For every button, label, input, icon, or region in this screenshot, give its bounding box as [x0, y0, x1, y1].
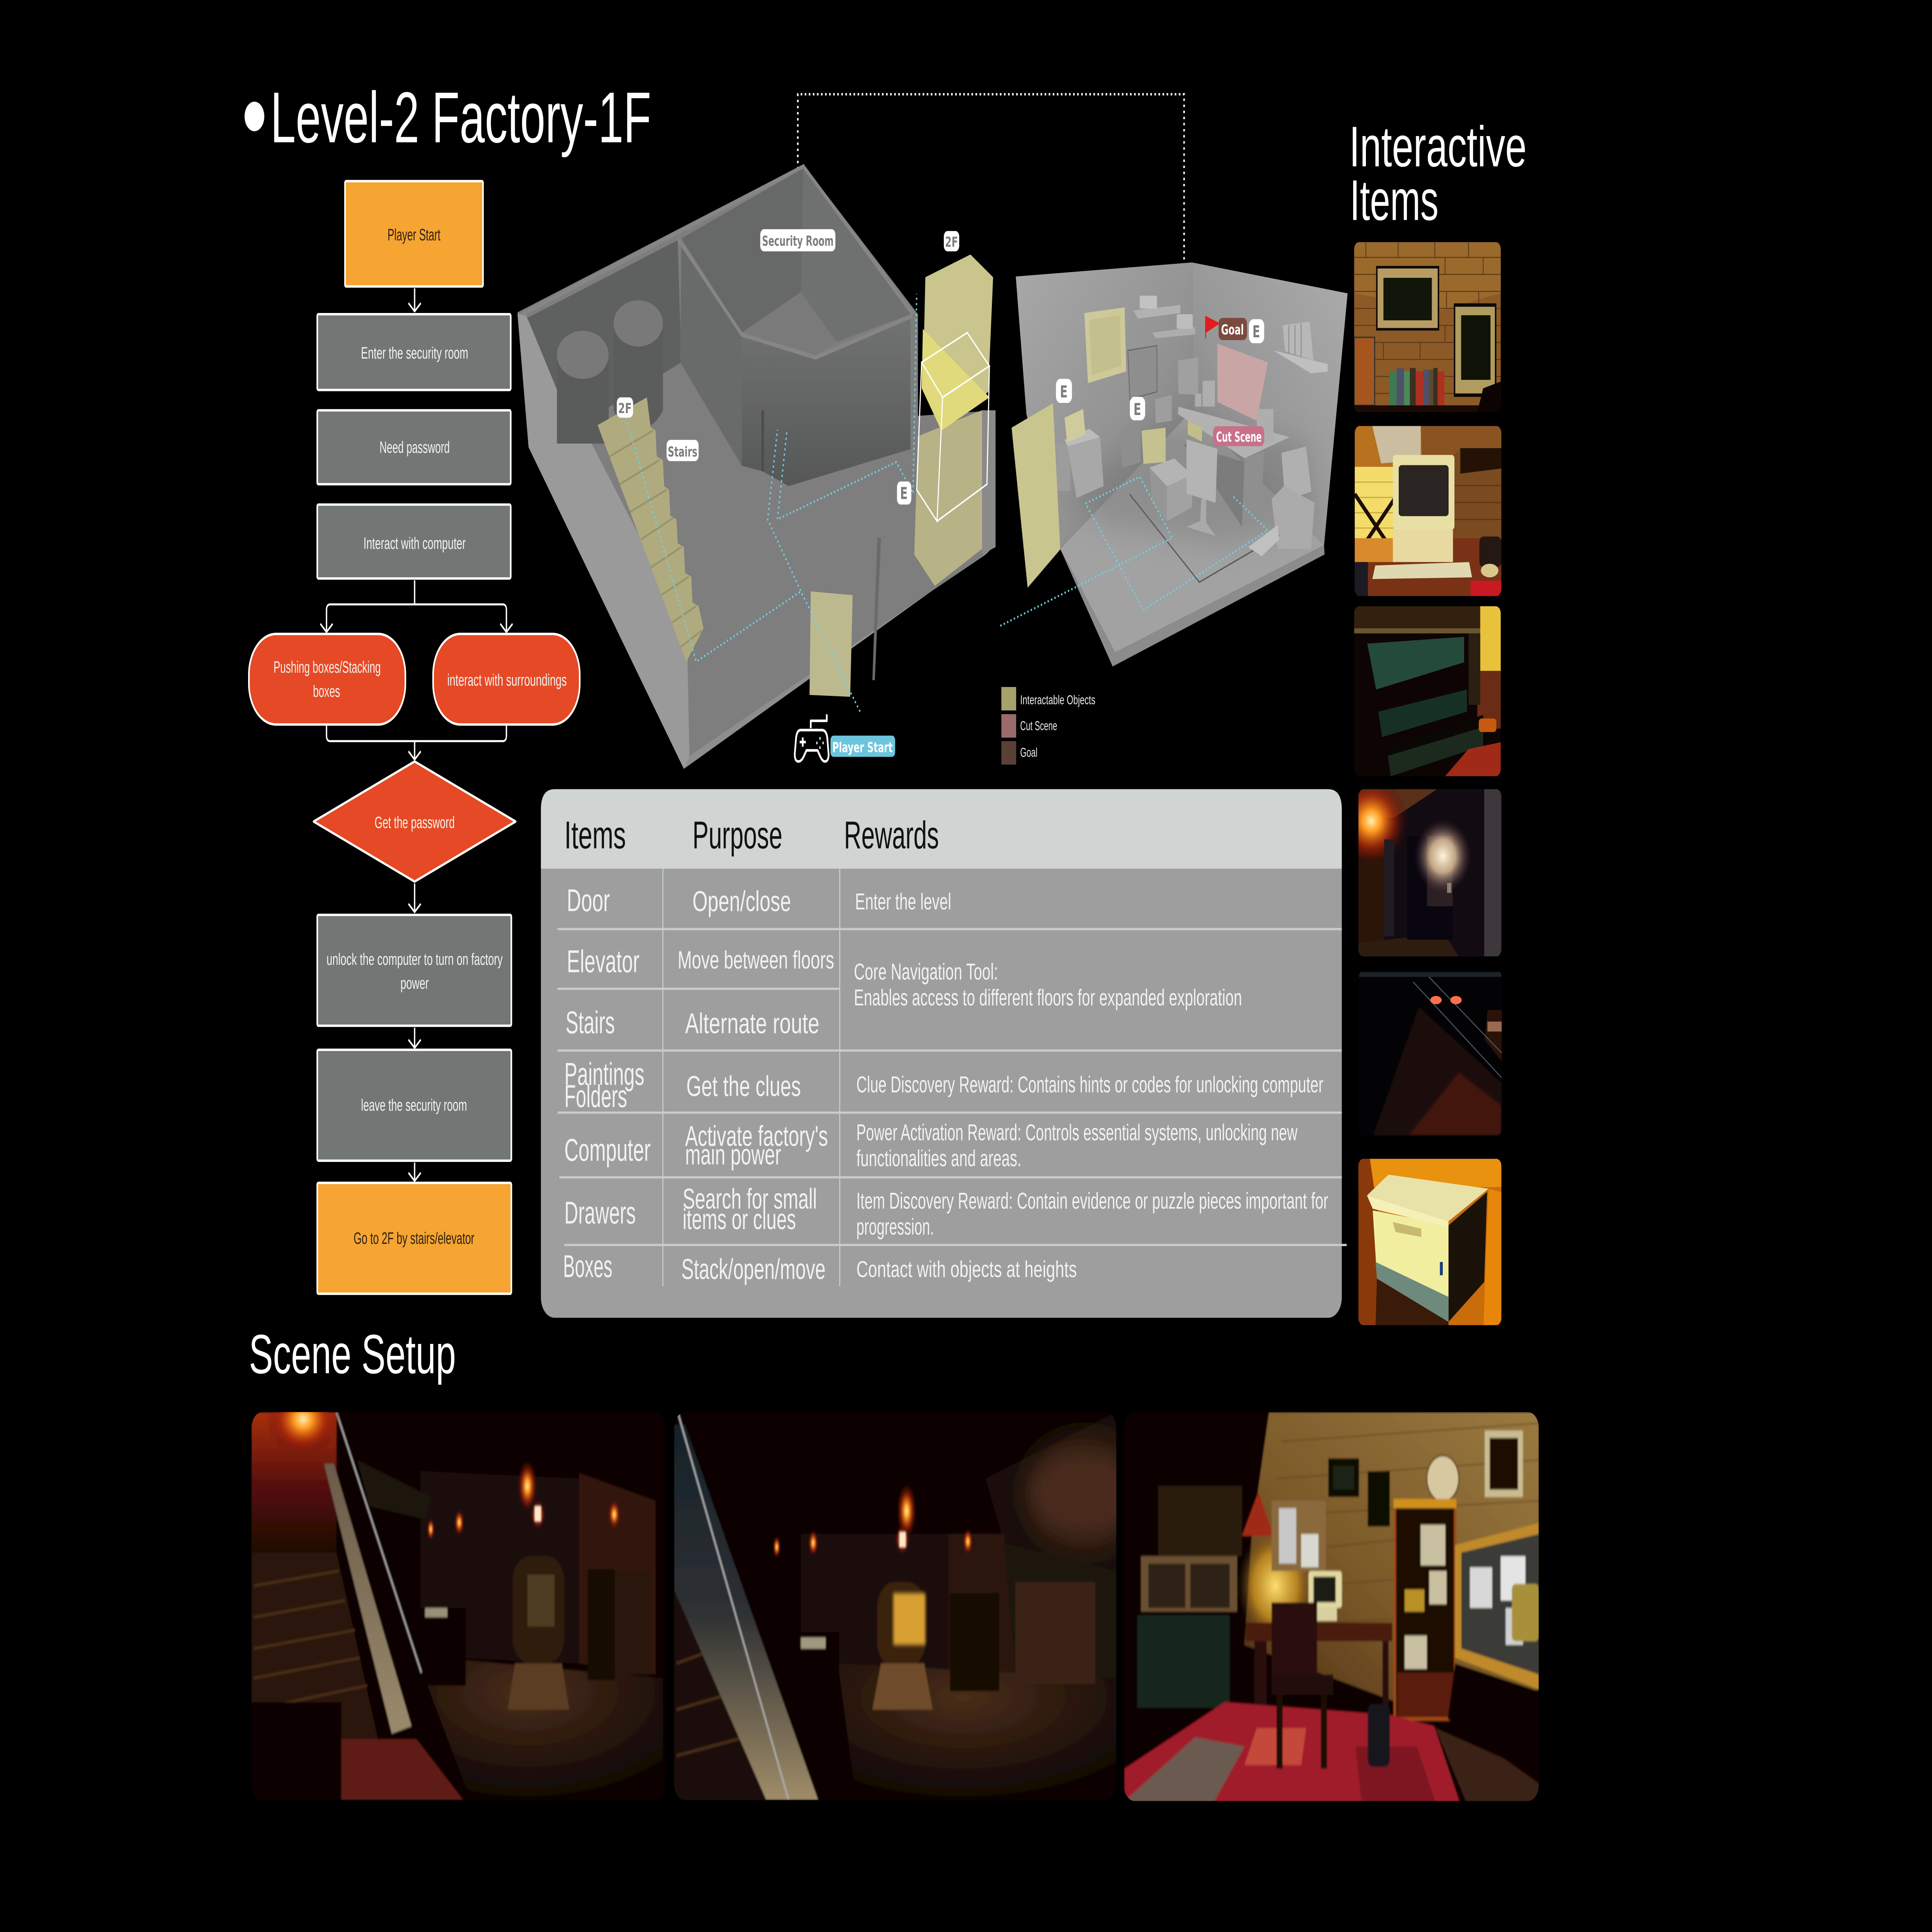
column: items: Computer	[564, 1132, 651, 1167]
decision: Get the password: Get the password	[374, 813, 455, 832]
column: purpose: Activate factory's	[685, 1121, 828, 1152]
wall rims	[522, 166, 913, 358]
step: Player Start: Player Start	[388, 225, 440, 244]
decision: Get the password	[314, 762, 516, 882]
left wall	[1016, 262, 1192, 549]
heading: Scene Setup: Scene Setup	[249, 1323, 456, 1385]
table header: Purpose	[692, 814, 782, 857]
tag: E box: E	[1134, 400, 1141, 419]
column: items: Folders	[564, 1078, 627, 1114]
column: items: Door	[567, 883, 610, 918]
legend	[1002, 687, 1095, 765]
photo: dark staircase	[1359, 970, 1502, 1136]
column: rewards: Clue Discovery Reward: Contains hints or codes for unlocking computer	[856, 1071, 1323, 1097]
step: Player Start	[345, 181, 483, 286]
legend: goal: Goal	[1020, 745, 1037, 760]
elevator tower	[914, 255, 996, 586]
table header: Rewards	[844, 814, 939, 857]
legend: interactable	[1002, 687, 1095, 711]
tag: Security Room: Security Room	[762, 233, 833, 250]
tag: 2F stairs: 2F	[618, 401, 632, 417]
legend: interactable: Interactable Objects	[1020, 693, 1095, 707]
photo: elevator door	[1359, 789, 1502, 957]
back wall of open room	[527, 240, 681, 444]
photo: open drawers	[1354, 606, 1501, 776]
column: purpose: main power	[685, 1139, 781, 1171]
title: Level-2 Factory-1F	[270, 77, 651, 158]
column: purpose: Move between floors	[678, 946, 834, 974]
column: items: Paintings	[564, 1056, 645, 1092]
column: rewards: Contact with objects at heights	[856, 1256, 1077, 1282]
tag: E door	[1056, 379, 1072, 403]
floor	[1060, 410, 1324, 652]
step: leave the security room: leave the security room	[361, 1096, 467, 1114]
player start marker	[795, 714, 895, 762]
tag: Stairs: Stairs	[668, 444, 697, 460]
column: items: Boxes	[563, 1248, 612, 1284]
table header	[541, 789, 1342, 869]
flowchart	[249, 181, 580, 1294]
legend: cut scene	[1002, 714, 1057, 738]
security room interior	[681, 168, 803, 333]
tag: E key	[897, 481, 911, 505]
factory floor plan 3D model	[517, 165, 996, 769]
items table	[541, 789, 1347, 1318]
diagonal partition wall	[680, 242, 742, 466]
tag: 2F stairs	[617, 397, 633, 418]
step: Need password: Need password	[379, 438, 450, 456]
column: rewards	[854, 888, 1328, 1282]
tag: E goal	[1249, 319, 1264, 343]
tag: E key: E	[900, 483, 908, 503]
table header: Items	[564, 814, 626, 857]
step: leave the security room	[317, 1050, 511, 1161]
player start marker: Player Start	[832, 740, 893, 756]
step: Interact with computer: Interact with computer	[364, 534, 466, 553]
cyan route	[626, 294, 917, 712]
step: unlock the computer: unlock the computer to turn on factory	[327, 950, 503, 968]
speaker and computer parts	[1195, 381, 1274, 442]
column: purpose: Get the clues	[686, 1071, 801, 1102]
thin pole	[872, 538, 881, 680]
step: interact with surroundings	[433, 634, 580, 724]
icon: goal flag	[1206, 316, 1219, 338]
step: unlock the computer	[317, 915, 511, 1026]
step: interact with surroundings: interact with surroundings	[447, 671, 567, 689]
floor rug outline	[1129, 494, 1279, 582]
tag: E box	[1130, 397, 1145, 420]
security room outer walls	[742, 318, 911, 486]
step: Pushing boxes: boxes	[313, 682, 340, 701]
heading: Interactive Items: Items	[1350, 168, 1439, 232]
chair	[1187, 439, 1218, 536]
desk	[1178, 406, 1290, 527]
tag: Cut Scene: Cut Scene	[1216, 429, 1262, 446]
step: unlock the computer: power	[400, 974, 429, 992]
photo: office corner with desk	[1124, 1412, 1539, 1802]
heading: Interactive Items: Interactive	[1349, 114, 1527, 179]
table grid	[558, 869, 1347, 1286]
column: items: Drawers	[564, 1195, 636, 1230]
photo: cardboard box	[1359, 1159, 1502, 1325]
stairs	[598, 397, 704, 662]
cyan route	[1000, 477, 1268, 626]
column: purpose: Open/close	[692, 886, 791, 918]
white dotted connector between rooms	[798, 94, 1184, 277]
tag: 2F tower	[944, 231, 959, 252]
door panel	[810, 592, 853, 697]
column: items	[563, 883, 651, 1284]
boxes	[1057, 357, 1315, 549]
thin partition	[762, 410, 764, 471]
tag: E door: E	[1060, 382, 1068, 401]
step: Interact with computer	[317, 505, 511, 578]
tag: 2F tower: 2F	[945, 235, 958, 250]
column: purpose	[678, 886, 834, 1285]
papers	[1248, 525, 1279, 556]
cylinders	[557, 300, 663, 444]
ambient shadow under furniture	[1060, 422, 1312, 545]
column: rewards: functionalities and areas.	[856, 1145, 1021, 1171]
step: Need password	[317, 410, 511, 484]
step: Enter the security room	[317, 314, 511, 390]
column: purpose: Alternate route	[685, 1008, 820, 1039]
photo: old computer on desk	[1355, 426, 1502, 596]
step: Pushing boxes: Pushing boxes/Stacking	[274, 658, 381, 676]
security room 3D model	[1000, 262, 1348, 667]
column: rewards: Enables access to different floors for expanded exploration	[854, 985, 1242, 1010]
photo: corridor with stairs, view two	[674, 1412, 1143, 1800]
flow arrows	[320, 288, 513, 1181]
column: purpose: Stack/open/move	[681, 1253, 825, 1285]
column: items: Stairs	[566, 1005, 615, 1040]
step: Go to 2F	[317, 1183, 511, 1294]
tag: E goal: E	[1252, 322, 1260, 342]
column: rewards: progression.	[856, 1214, 934, 1240]
tag: Goal: Goal	[1221, 322, 1244, 338]
step: Pushing boxes	[249, 634, 405, 724]
step: Go to 2F: Go to 2F by stairs/elevator	[354, 1229, 474, 1247]
door panel	[1012, 403, 1060, 588]
tag: Goal	[1219, 318, 1247, 340]
legend: goal	[1002, 741, 1037, 765]
column: rewards: Enter the level	[855, 888, 951, 914]
building shell and floor	[517, 165, 996, 769]
right wall	[1192, 262, 1348, 545]
photo: paintings on brick wall	[1354, 242, 1501, 412]
column: rewards: Core Navigation Tool:	[854, 959, 998, 985]
legend: cut scene: Cut Scene	[1020, 719, 1057, 733]
column: rewards: Item Discovery Reward: Contain evidence or puzzle pieces important for	[856, 1188, 1328, 1214]
column: rewards: Power Activation Reward: Controls essential systems, unlocking new	[856, 1119, 1298, 1145]
photo: corridor with stairs, view one	[252, 1383, 665, 1800]
heading: Interactive Items	[1349, 114, 1527, 232]
cut scene monitor	[1218, 344, 1268, 421]
left exterior wall	[517, 314, 689, 769]
column: purpose: Search for small	[683, 1183, 817, 1215]
tag: Security Room	[760, 229, 835, 252]
column: items: Elevator	[567, 944, 639, 979]
poster frames and shelves	[1084, 296, 1328, 399]
step: Enter the security room: Enter the security room	[361, 344, 468, 362]
icon: game controller	[795, 714, 828, 762]
column: purpose: items or clues	[683, 1204, 796, 1235]
